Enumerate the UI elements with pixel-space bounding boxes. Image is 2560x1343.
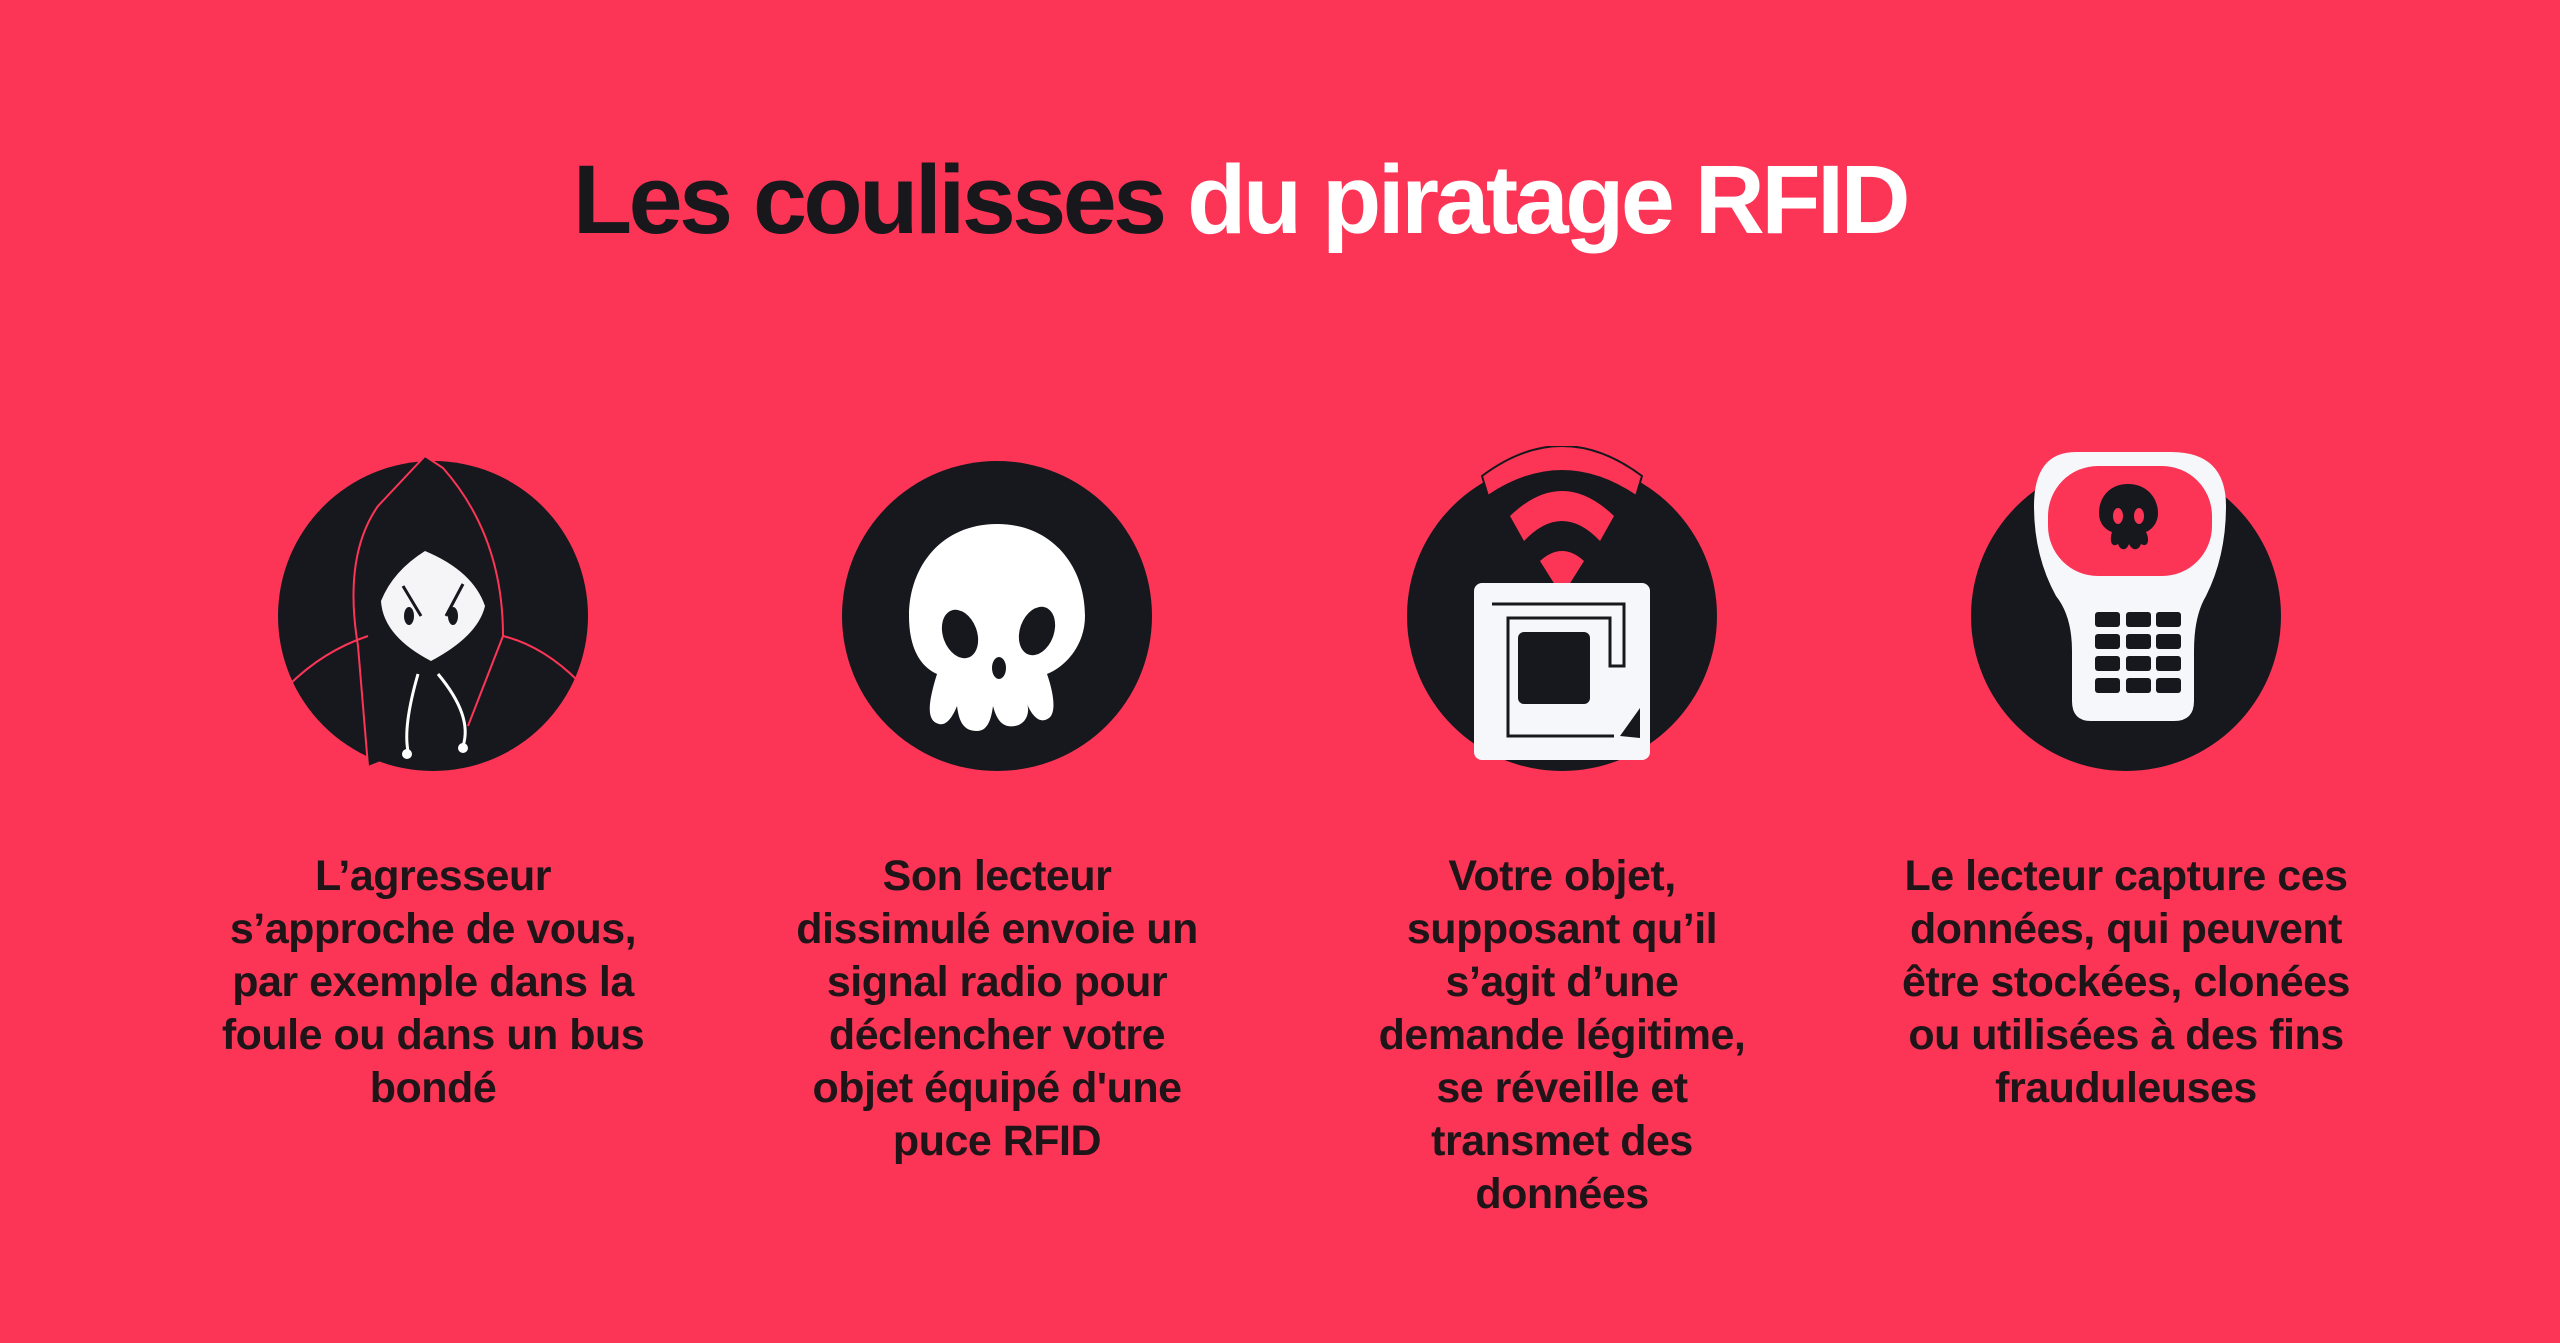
text: step 3: demande légitime, (1379, 1011, 1745, 1059)
text: step 2 (796, 852, 1198, 1165)
text: step 1 (222, 852, 644, 1112)
text: step 4: ou utilisées à des fins (1908, 1011, 2344, 1059)
text: step 2: objet équipé d'une (812, 1064, 1182, 1112)
text: step 3: s’agit d’une (1446, 958, 1678, 1006)
icon: skull (842, 461, 1152, 771)
text: step 3: transmet des (1431, 1117, 1693, 1165)
text: step 2: dissimulé envoie un (796, 905, 1198, 953)
icon: hooded hacker (278, 457, 588, 771)
text: step 4: être stockées, clonées (1902, 958, 2350, 1006)
icon: RFID tag with signal (1407, 446, 1717, 771)
text: step 1: L’agresseur (315, 852, 551, 900)
text: step 1: foule ou dans un bus (222, 1011, 644, 1059)
text: step 2: déclencher votre (829, 1011, 1165, 1059)
text: step 3: se réveille et (1436, 1064, 1688, 1112)
text: step 3: supposant qu’il (1407, 905, 1717, 953)
icon: handheld RFID reader (1971, 452, 2281, 771)
text: step 1: par exemple dans la (232, 958, 634, 1006)
text: step 1: s’approche de vous, (230, 905, 636, 953)
text: step 3 (1379, 852, 1745, 1218)
text: step 4: Le lecteur capture ces (1904, 852, 2348, 900)
text: step 4 (1902, 852, 2350, 1112)
text: step 4: frauduleuses (1995, 1064, 2257, 1112)
text: step 2: Son lecteur (883, 852, 1111, 900)
text: step 3: Votre objet, (1448, 852, 1676, 900)
title: Les coulisses du piratage RFID (573, 145, 1907, 254)
text: step 4: données, qui peuvent (1910, 905, 2342, 953)
text: step 2: signal radio pour (827, 958, 1167, 1006)
text: step 3: données (1475, 1170, 1649, 1218)
text: step 1: bondé (370, 1064, 496, 1112)
text: step 2: puce RFID (893, 1117, 1101, 1165)
